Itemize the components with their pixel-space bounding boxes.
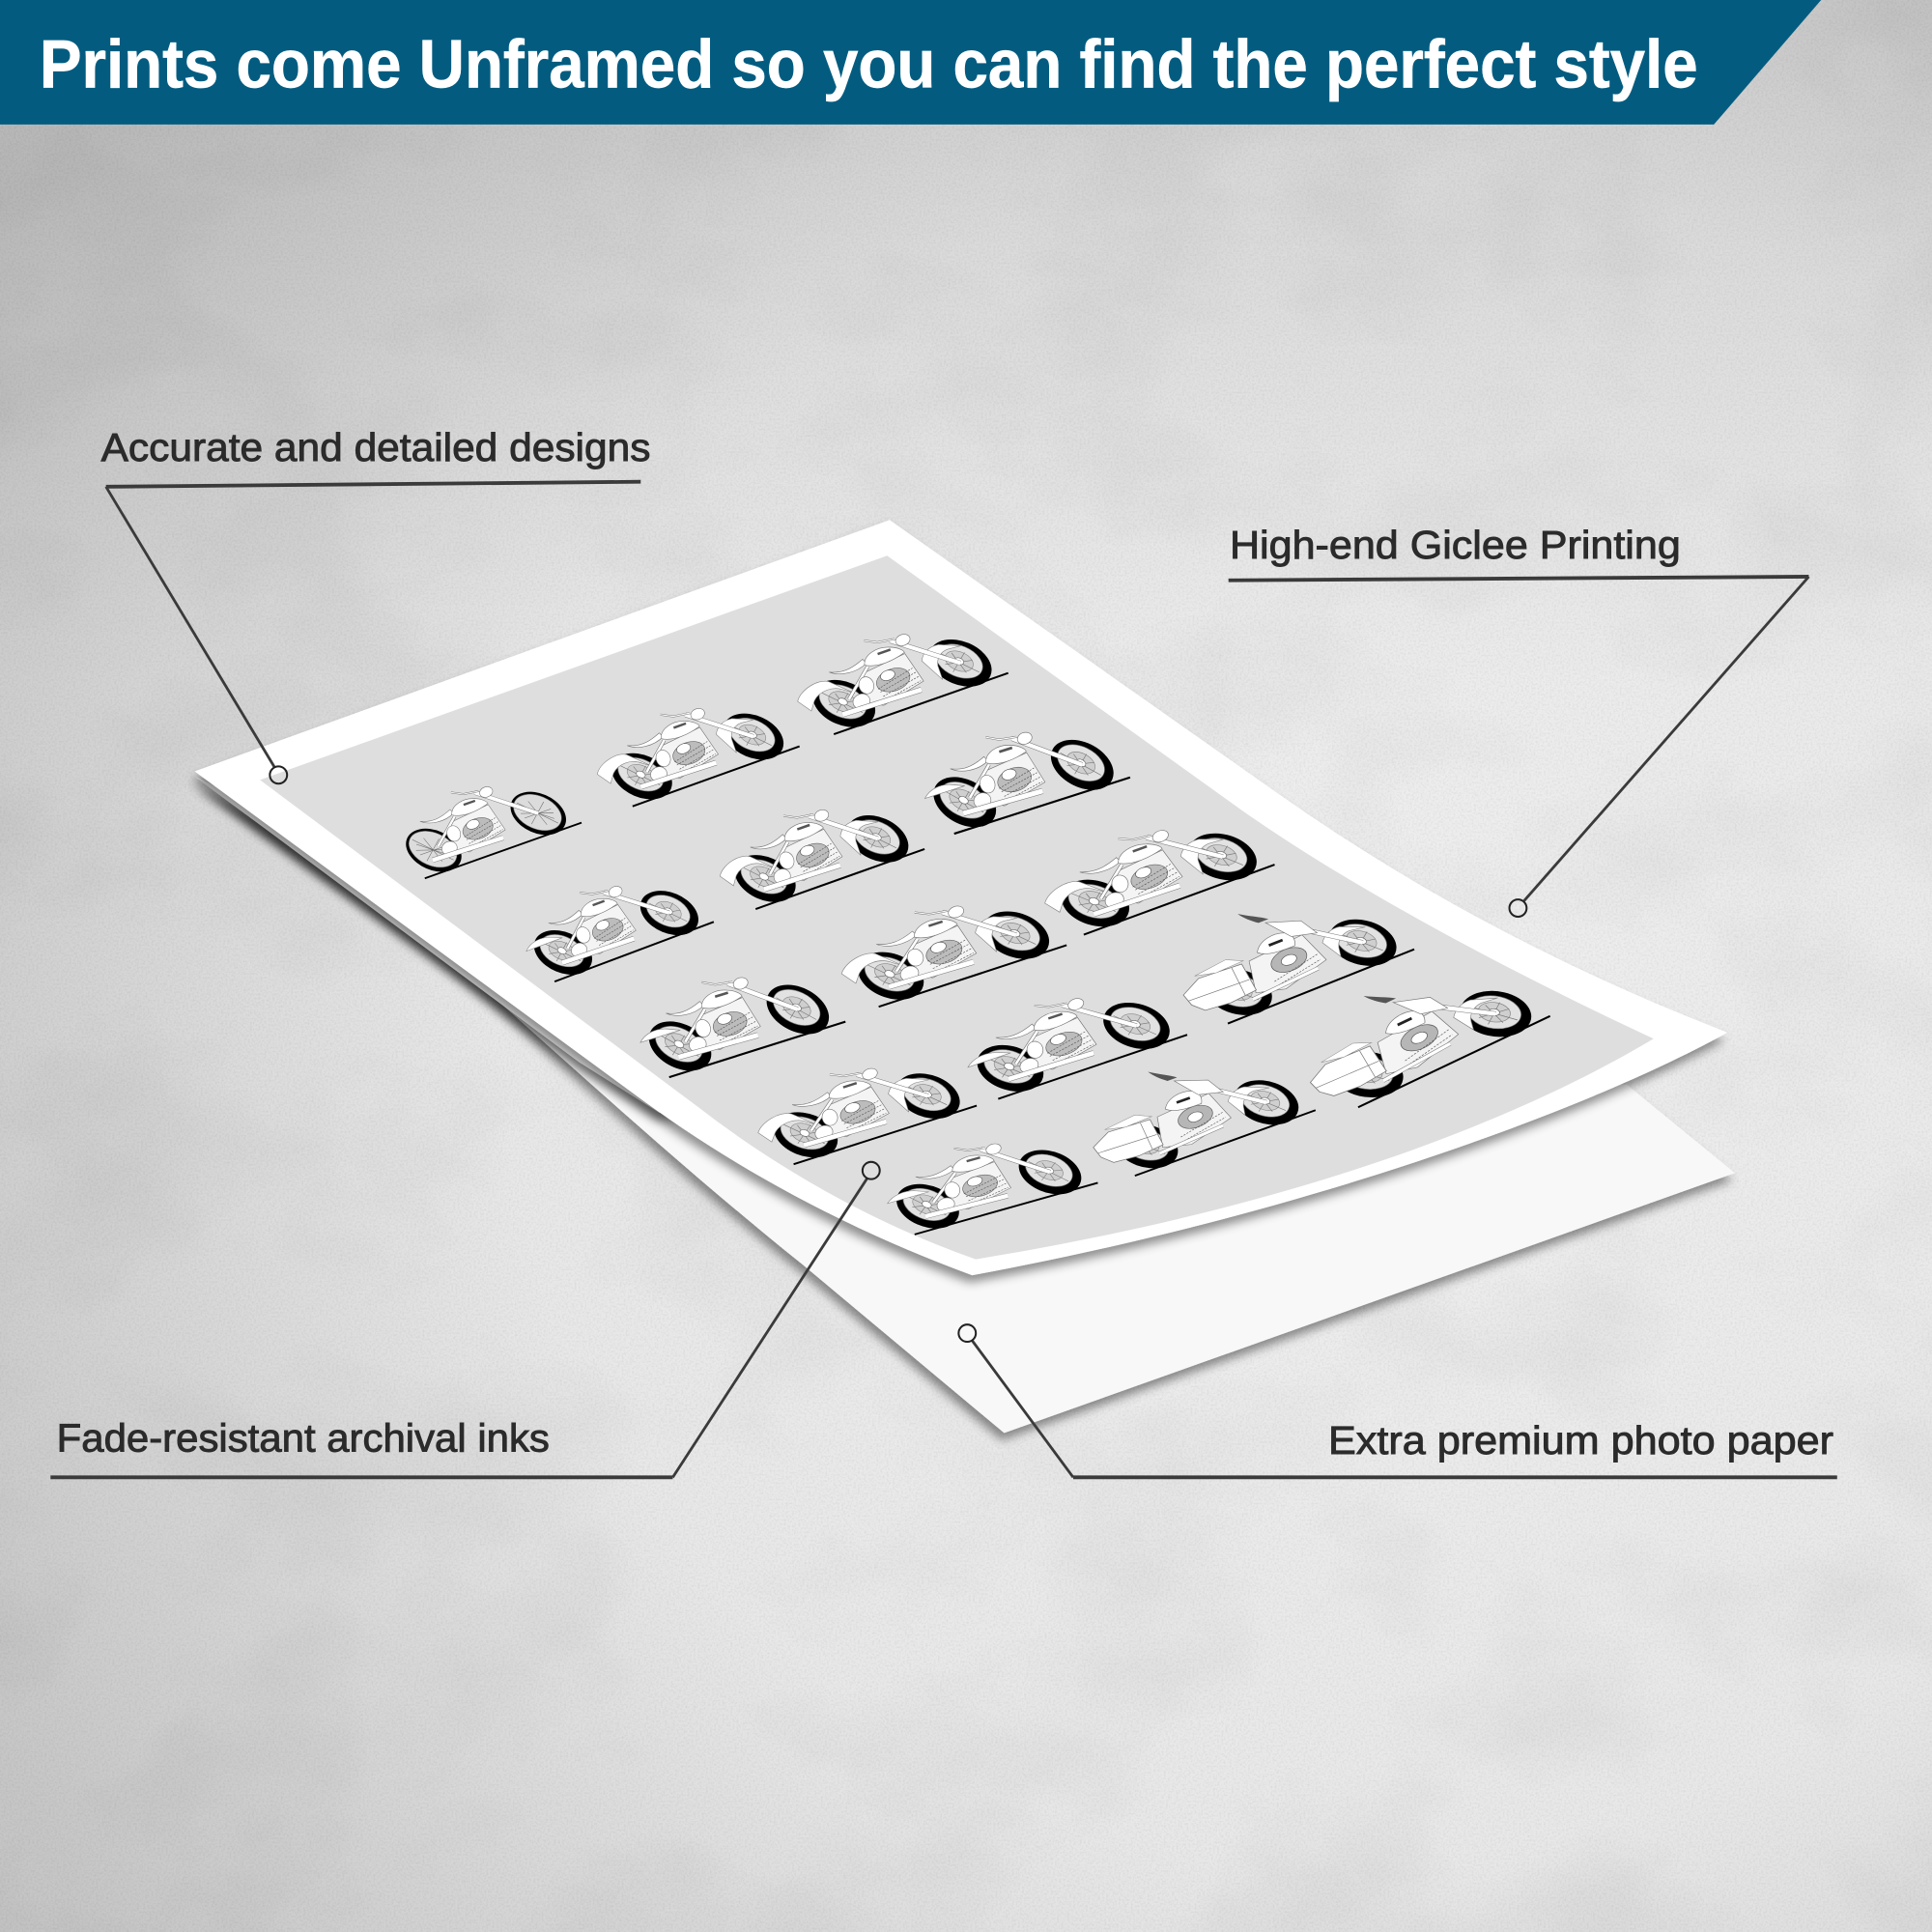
callout: extra premium photo paper	[958, 1324, 1837, 1477]
motorcycle 14	[1075, 1023, 1320, 1197]
back sheet: extra premium photo paper	[195, 777, 1735, 1433]
motorcycle 4	[512, 852, 718, 999]
callout: high-end giclee printing: High-end Giclee Printing	[1230, 523, 1681, 567]
callout: fade-resistant archival inks: Fade-resistant archival inks	[57, 1416, 550, 1461]
header banner	[0, 0, 1821, 125]
motorcycle 10	[748, 1035, 980, 1182]
motorcycle 11	[954, 962, 1191, 1117]
top print sheet	[195, 520, 1727, 1275]
motorcycle 3	[786, 599, 1012, 753]
motorcycle 7	[627, 945, 849, 1094]
motorcycle 12	[1163, 858, 1419, 1046]
motorcycle 8	[831, 871, 1070, 1026]
callout: accurate and detailed designs	[101, 425, 650, 783]
motorcycle 9	[1033, 791, 1279, 955]
grey print area	[260, 555, 1654, 1260]
title: Prints come Unframed so you can find the perfect style	[40, 26, 1698, 102]
callout: fade-resistant archival inks	[50, 1162, 880, 1477]
paper stack	[195, 520, 1735, 1433]
motorcycle 5	[708, 776, 928, 928]
callout: high-end giclee printing	[1229, 523, 1808, 917]
motorcycle 13	[876, 1114, 1101, 1251]
motorcycle 6	[911, 699, 1134, 852]
motorcycle 1	[385, 754, 585, 895]
motorcycle 2	[585, 674, 804, 825]
motorcycle 15	[1287, 927, 1555, 1132]
callout: accurate and detailed designs: Accurate and detailed designs	[101, 425, 650, 469]
callout: extra premium photo paper: Extra premium photo paper	[1328, 1418, 1833, 1463]
middle sheet edge	[195, 777, 739, 1113]
